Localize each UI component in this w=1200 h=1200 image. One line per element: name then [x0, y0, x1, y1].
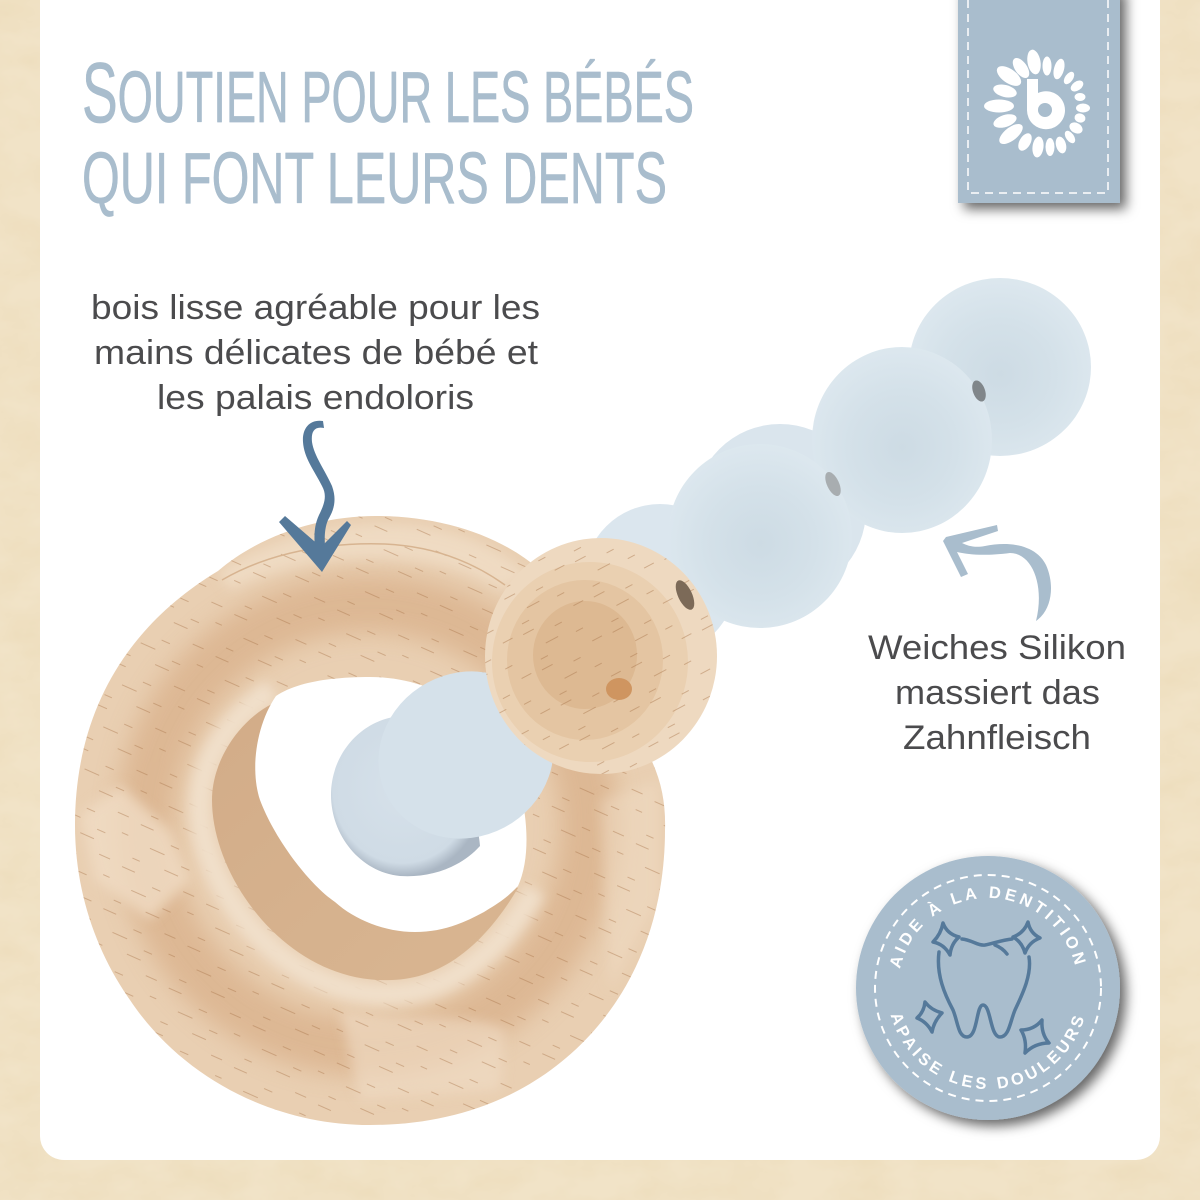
silicone bead: upper: [812, 347, 992, 533]
title: SOUTIEN POUR LES BÉBÉS: [82, 46, 694, 141]
icon: flower logo: [984, 49, 1090, 158]
badge: teething aid: [853, 853, 1135, 1135]
silicone bead: front left: [349, 641, 583, 869]
silicone bead: top: [909, 278, 1091, 456]
silicone bead: behind upper: [694, 424, 866, 596]
silicone bead: small behind: [584, 504, 736, 656]
text: wood callout: mains délicates de bébé et: [94, 334, 539, 372]
text: silicone callout: Zahnfleisch: [903, 719, 1091, 757]
wood ring: [60, 500, 680, 1140]
badge top label: AIDE À LA DENTITION: [890, 886, 1086, 968]
text: wood callout: les palais endoloris: [157, 379, 474, 417]
connector screw: top: [970, 379, 988, 403]
ring shading band: [145, 603, 589, 1047]
hole: [255, 677, 526, 932]
bead hole: [672, 578, 698, 612]
arrow: wood callout: [279, 421, 351, 572]
icon: tooth with sparkles: [917, 922, 1049, 1053]
text: wood callout: bois lisse agréable pour les: [91, 289, 540, 327]
wood knot: [606, 678, 632, 700]
connector screw: middle: [822, 470, 844, 498]
title: [82, 46, 694, 219]
ring light patches: [80, 524, 660, 1100]
ring inner wall: [212, 704, 518, 980]
bead growth rings: [492, 562, 688, 762]
text: wood callout: [91, 289, 540, 417]
icon: letter b: [1027, 79, 1065, 129]
text: silicone callout: massiert das: [895, 674, 1100, 712]
badge bottom label: APAISE LES DOULEURS: [890, 1015, 1084, 1089]
silicone bead: middle: [668, 444, 852, 628]
ring front edge line: [222, 544, 505, 585]
title: QUI FONT LEURS DENTS: [82, 139, 667, 219]
ring grain: [75, 516, 666, 1116]
wood bead: [480, 530, 720, 780]
text: silicone callout: Weiches Silikon: [868, 629, 1126, 667]
ring chamfer: [200, 690, 535, 994]
silicone bead: rear left: [331, 716, 480, 876]
text: silicone callout: [868, 629, 1126, 757]
logo tag: [958, 0, 1120, 203]
product: teething ring toy: [60, 278, 1091, 1140]
arrow: silicone callout: [943, 525, 1051, 621]
